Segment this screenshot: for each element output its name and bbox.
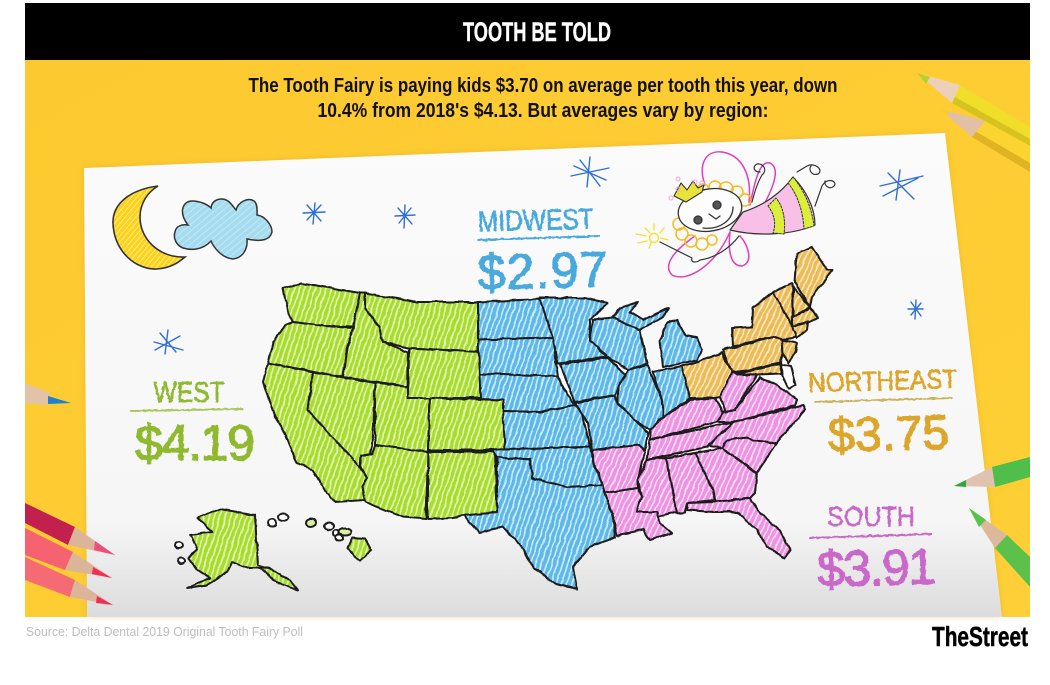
label: northeast: $3.75	[827, 406, 950, 463]
Indiana	[653, 366, 690, 417]
Texas	[463, 457, 615, 589]
Wyoming	[408, 348, 481, 398]
wand star	[636, 224, 668, 248]
North Dakota	[478, 299, 553, 340]
icon: red and coral pencils bottom left	[25, 503, 115, 605]
Maryland	[737, 364, 782, 375]
Virginia	[717, 377, 797, 422]
Pennsylvania	[723, 337, 783, 373]
label: northeast	[808, 364, 958, 463]
label: south: $3.91	[816, 538, 937, 598]
label: west: WEST	[154, 377, 225, 409]
Tennessee	[647, 422, 733, 460]
Georgia	[695, 448, 757, 502]
paper sheet	[84, 133, 1002, 617]
title bar	[25, 3, 1030, 60]
icon: tooth fairy	[636, 152, 835, 277]
icon: blue stars	[154, 157, 923, 354]
fairy hair curls	[673, 181, 751, 250]
icon: yellow pencils top right	[917, 73, 1030, 172]
New York	[732, 292, 797, 346]
map: south region	[592, 372, 805, 558]
South Carolina	[722, 437, 777, 472]
subtitle text: The Tooth Fairy is paying kids $3.70 on average per tooth this year, down	[248, 74, 838, 97]
Vermont	[773, 283, 793, 325]
Idaho	[343, 293, 408, 387]
icon: blue pencil left	[25, 383, 71, 405]
subtitle text: 10.4% from 2018's $4.13. But averages vary by region:	[318, 99, 768, 122]
Mississippi	[637, 458, 677, 517]
South Dakota	[478, 338, 558, 377]
Alaska	[187, 509, 298, 590]
Oregon	[268, 322, 353, 377]
label: south	[809, 501, 937, 598]
fairy crown	[669, 177, 704, 202]
Arkansas	[592, 445, 645, 493]
yellow background panel	[25, 60, 1030, 617]
fairy wings	[669, 152, 775, 277]
Missouri	[575, 395, 648, 450]
Michigan upper	[613, 302, 668, 330]
Iowa	[560, 358, 627, 402]
fairy eyes and smile	[694, 201, 733, 228]
Kentucky	[650, 398, 723, 440]
label: west: $4.19	[135, 415, 255, 471]
fairy dress	[730, 177, 815, 234]
label: midwest	[477, 203, 608, 301]
Kansas	[503, 405, 590, 449]
Minnesota	[540, 298, 608, 363]
Oklahoma	[493, 447, 603, 487]
subtitle text	[248, 74, 838, 122]
label: midwest: $2.97	[477, 241, 608, 301]
Montana	[365, 293, 478, 352]
Nevada	[308, 372, 375, 467]
New Mexico	[428, 452, 497, 519]
map: midwest region	[463, 298, 702, 589]
label: south: SOUTH	[827, 501, 915, 532]
Wisconsin	[590, 318, 647, 370]
Florida	[687, 498, 790, 558]
Washington	[283, 283, 360, 327]
Connecticut and Rhode Island	[792, 322, 808, 338]
label: midwest: MIDWEST	[477, 203, 594, 239]
Nebraska	[480, 374, 575, 412]
map: northeast region	[682, 247, 833, 398]
Arizona	[361, 445, 428, 519]
New Hampshire	[793, 287, 810, 317]
Louisiana	[605, 488, 672, 540]
Ohio	[682, 353, 732, 398]
label: west	[130, 377, 255, 471]
Alabama	[666, 453, 715, 513]
North Carolina	[707, 405, 805, 448]
West Virginia	[720, 372, 757, 412]
icon: crescent moon	[113, 186, 185, 269]
fairy face	[675, 184, 745, 236]
California	[263, 363, 367, 502]
map: west region	[187, 283, 505, 590]
Michigan lower	[660, 320, 702, 367]
label: northeast: NORTHEAST	[808, 364, 958, 398]
Maine	[795, 247, 833, 307]
New Jersey	[782, 340, 797, 363]
Delmarva peninsula	[780, 364, 796, 389]
Utah	[375, 383, 430, 452]
map: Alaska islands and Hawaii	[175, 514, 372, 564]
Colorado	[428, 398, 505, 450]
fairy legs	[752, 164, 835, 206]
Illinois	[618, 365, 663, 430]
Massachusetts	[792, 308, 818, 326]
source note: Source: Delta Dental 2019 Original Tooth Fairy Poll	[26, 625, 303, 639]
title bar: TOOTH BE TOLD	[463, 17, 611, 47]
icon: green pencils right	[954, 457, 1030, 587]
icon: cloud	[174, 199, 272, 259]
fairy arm and wand	[660, 236, 739, 262]
